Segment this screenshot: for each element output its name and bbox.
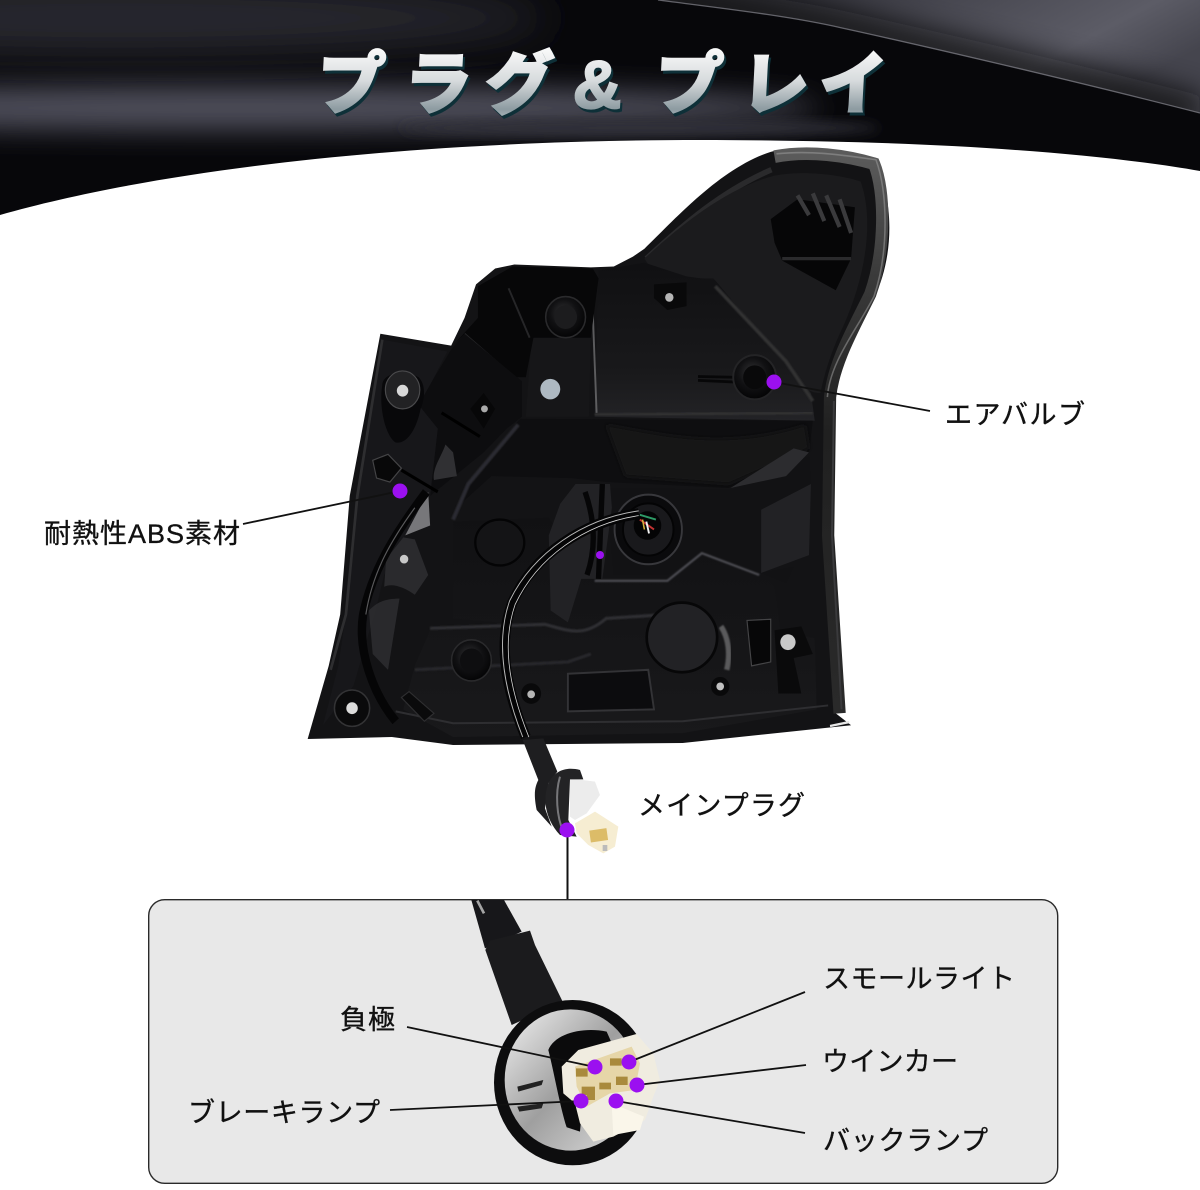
callout line: turn signal xyxy=(637,1065,806,1085)
callout line: back lamp xyxy=(616,1101,805,1133)
left lower bracket xyxy=(369,537,428,670)
cable grommet with wires xyxy=(549,484,682,622)
column with screw xyxy=(526,334,591,417)
title: プラグ&プレイ xyxy=(315,47,889,123)
louvre vent xyxy=(771,193,855,290)
callout line: small light xyxy=(629,992,805,1062)
label: turn signal: ウインカー xyxy=(822,1047,958,1077)
dot: back lamp xyxy=(608,1094,624,1108)
housing outline xyxy=(308,149,889,745)
callout line: brake lamp xyxy=(390,1101,581,1110)
plug sleeve xyxy=(523,738,557,827)
tail lamp rear housing xyxy=(308,149,889,745)
lower screws xyxy=(521,677,729,704)
dot: brake lamp xyxy=(574,1094,588,1108)
upper right panel xyxy=(644,173,867,393)
dot: negative pole xyxy=(588,1060,602,1074)
screw label xyxy=(540,379,560,399)
panel: connector pinout xyxy=(149,900,1058,1183)
dot: air valve xyxy=(766,374,782,390)
label: main plug: メインプラグ xyxy=(638,791,805,821)
screw boss upper left xyxy=(470,393,495,429)
label: heat resistant ABS: 耐熱性ABS素材 xyxy=(44,519,240,549)
air valve xyxy=(698,355,776,399)
connector photo xyxy=(471,900,660,1165)
plug head xyxy=(575,812,618,853)
outer rim xyxy=(646,153,885,713)
large plug top left of lower panel xyxy=(475,520,524,565)
label: brake lamp: ブレーキランプ xyxy=(188,1098,380,1128)
large round plug lower right xyxy=(647,603,717,672)
clip under lens xyxy=(373,413,480,492)
callout line: main plug to panel xyxy=(566,830,568,899)
label: negative pole: 負極 xyxy=(340,1005,395,1035)
lower panel xyxy=(403,518,817,737)
middle band xyxy=(461,419,813,504)
left wiring harness xyxy=(362,492,426,721)
clip at bottom left xyxy=(401,692,434,721)
lower left grommet xyxy=(452,640,491,681)
dot: ABS material xyxy=(392,484,408,498)
main cable xyxy=(503,511,639,737)
corner mounting stud xyxy=(334,690,370,726)
bolt and connector lower right xyxy=(721,619,813,694)
main plug xyxy=(523,738,618,853)
header edge highlight xyxy=(658,0,1200,113)
lower recess xyxy=(568,670,654,711)
panel background xyxy=(149,900,1058,1183)
rim glint xyxy=(830,722,849,726)
callout line: air valve xyxy=(774,382,930,411)
label: air valve: エアバルブ xyxy=(945,400,1085,430)
dot: small light xyxy=(622,1054,636,1070)
top screw xyxy=(654,282,687,310)
top grommet xyxy=(546,297,585,338)
label: small light: スモールライト xyxy=(823,964,1015,994)
dot: main plug xyxy=(560,822,574,838)
rubber ring xyxy=(545,769,583,837)
upper centre wall xyxy=(595,263,815,421)
wedge and tab at right xyxy=(606,448,811,583)
header upper-right surface xyxy=(640,0,1200,120)
callout line: negative pole xyxy=(407,1027,595,1067)
dot: turn signal xyxy=(630,1078,644,1092)
left wall xyxy=(323,340,447,725)
dot: housing small xyxy=(596,551,604,559)
white socket xyxy=(570,778,600,820)
left lens socket xyxy=(381,371,424,443)
callout line: ABS material xyxy=(243,491,400,524)
header background xyxy=(0,0,1200,220)
left black cavity xyxy=(451,267,599,377)
label: back lamp: バックランプ xyxy=(823,1126,988,1156)
